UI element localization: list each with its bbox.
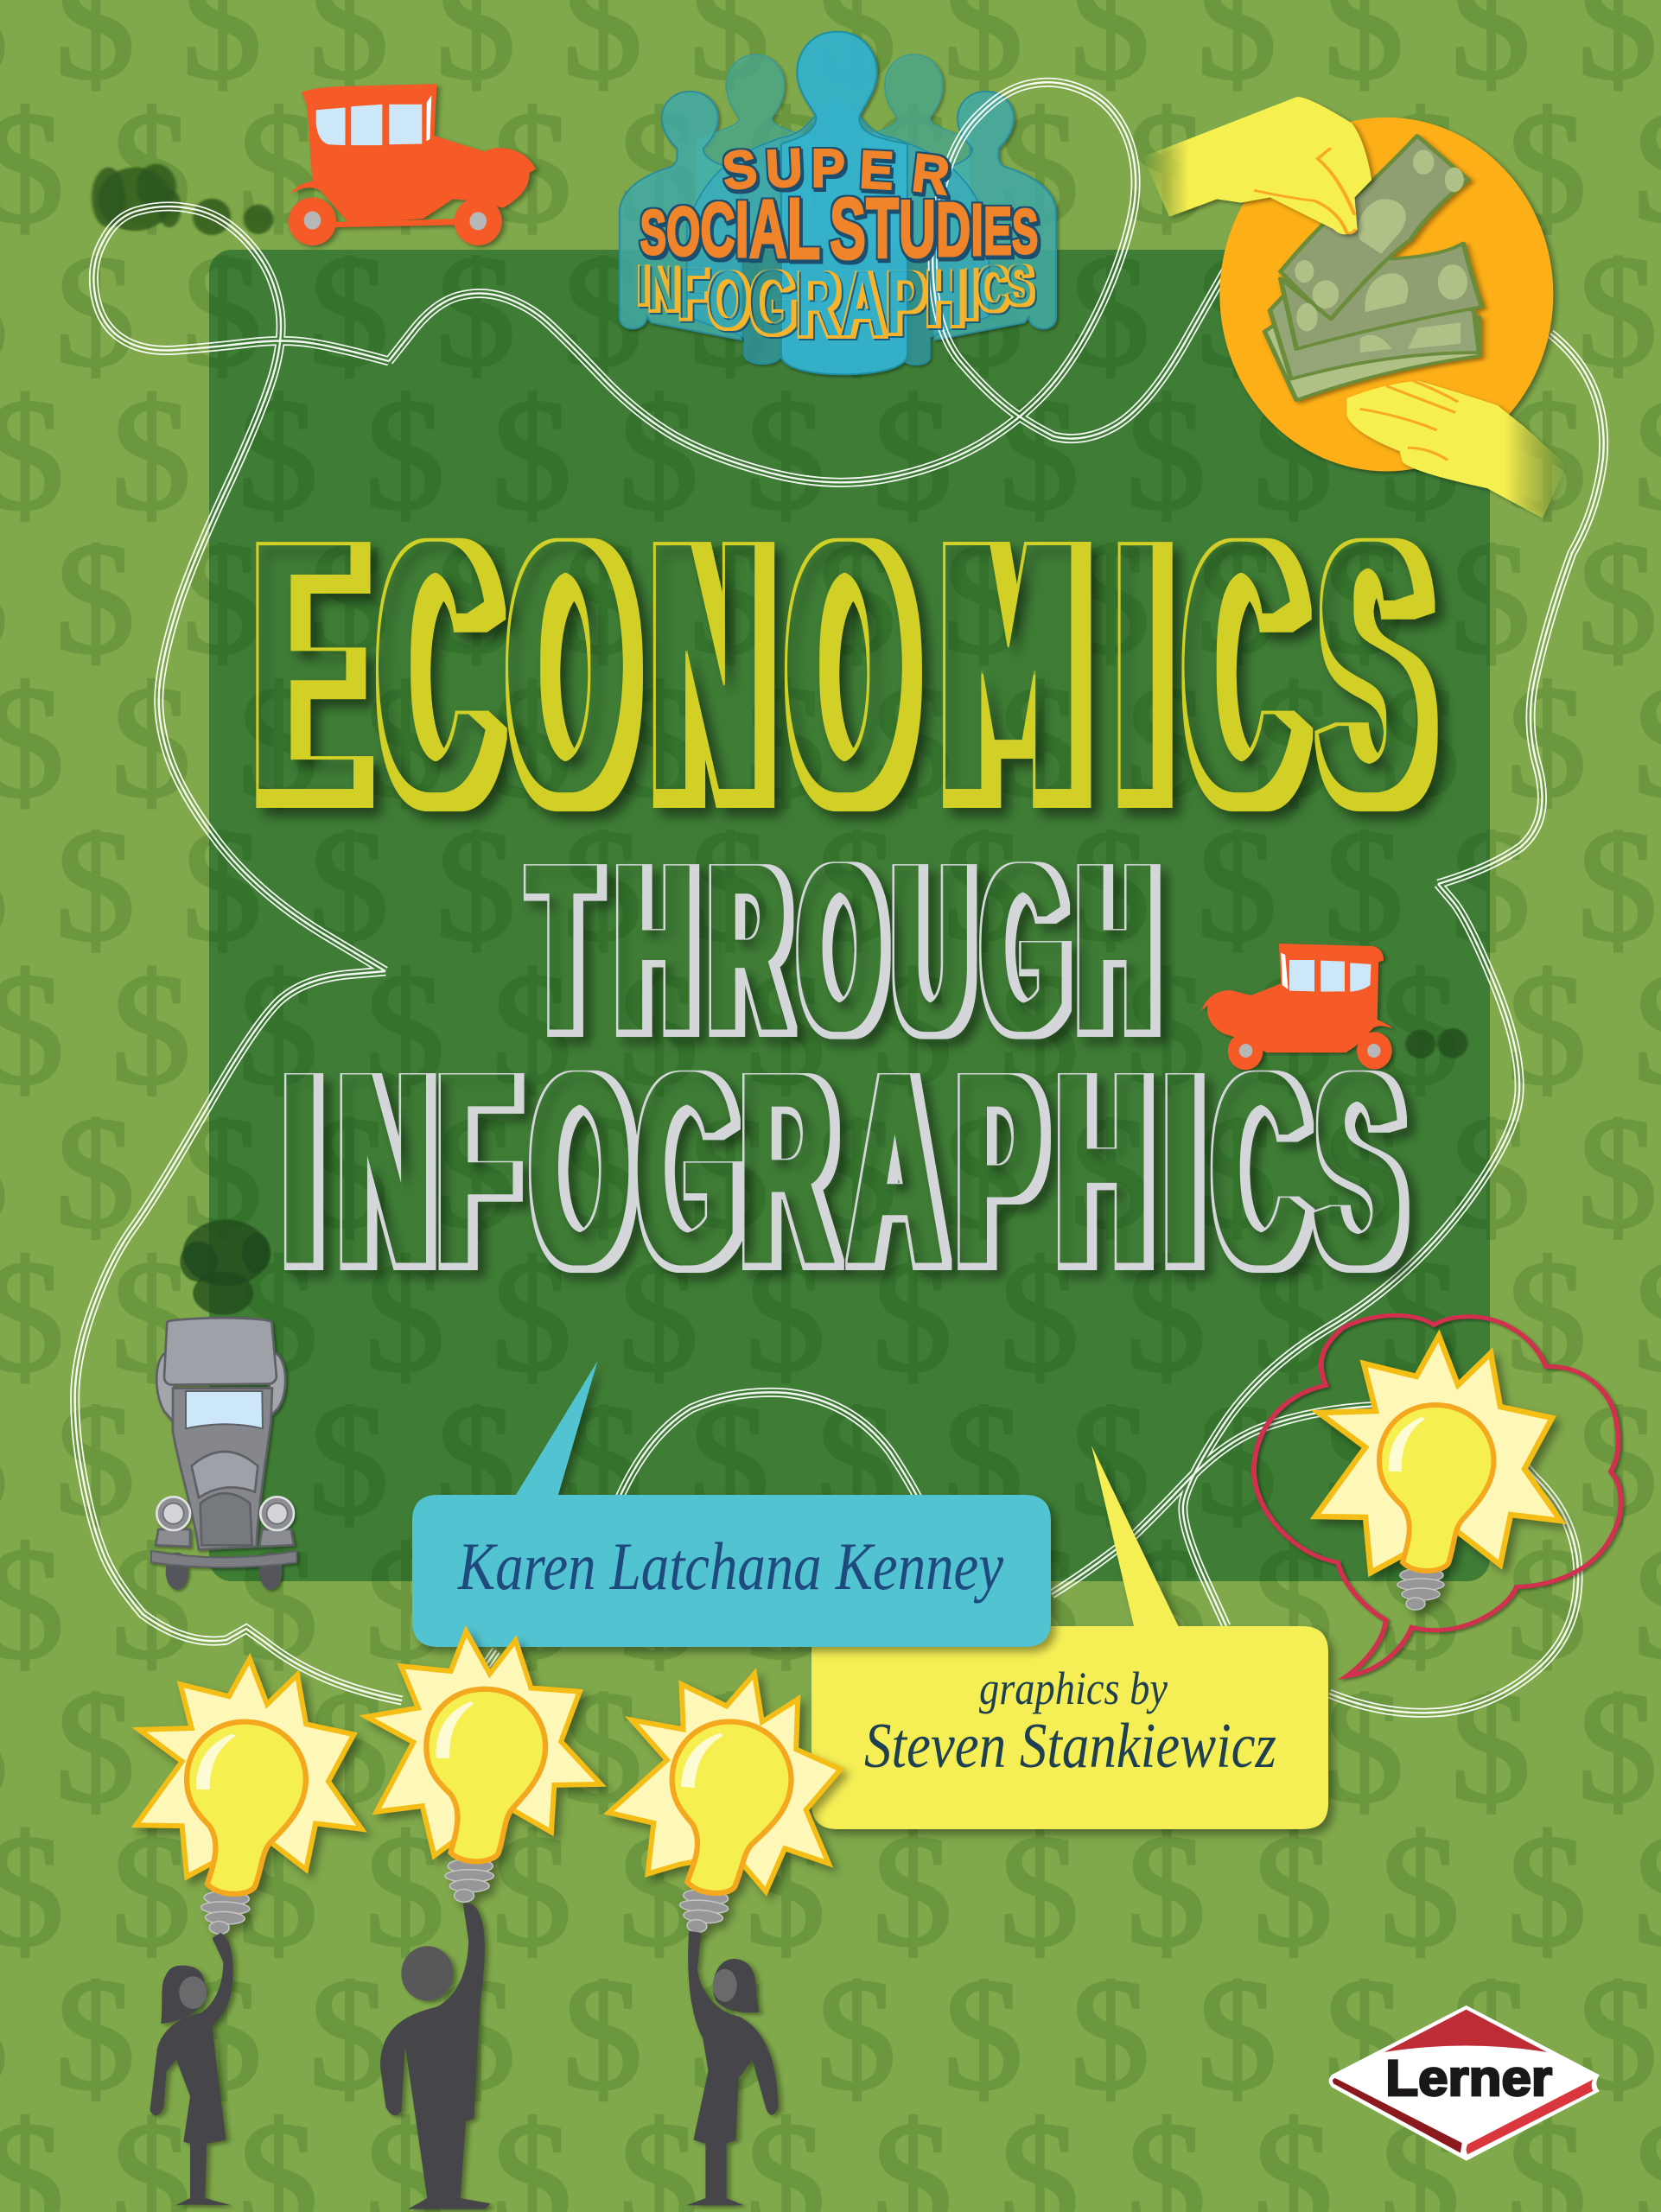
logo word: infographics: C (978, 255, 1009, 326)
title: economics: ECONO (263, 467, 912, 882)
dark green central panel (209, 250, 1490, 1581)
logo wordmark: Lerner (1385, 2051, 1552, 2107)
orange car top left (289, 84, 536, 245)
smoke: orange car top left (92, 164, 273, 235)
silhouettes holding bulbs (150, 1903, 779, 2209)
logo words: social studies: S (640, 197, 666, 268)
logo word: infographics: S (1009, 254, 1034, 317)
upper hand (1142, 97, 1371, 234)
logo word: infographics: H (926, 253, 965, 344)
logo words: social studies: L (787, 180, 820, 277)
logo word: infographics: R (797, 251, 842, 358)
title: economics: ICS (1124, 467, 1427, 882)
lower hand (1346, 381, 1567, 518)
logo word: infographics: P (887, 251, 926, 353)
blue speech box: author (412, 1361, 1051, 1647)
light bulb in thought bubble (1315, 1336, 1561, 1610)
logo words: social studies: S (1012, 196, 1038, 267)
logo word: infographics: I (965, 256, 978, 336)
logo words: social studies: C (700, 187, 735, 272)
credit: graphics by: graphics by (979, 1662, 1168, 1714)
logo words: social studies: A (749, 183, 787, 276)
author name: Karen Latchana Kenney (457, 1529, 1003, 1604)
red thought bubble (1254, 1315, 1621, 1676)
light bulb 1 (136, 1659, 362, 1936)
orange circle (1219, 118, 1553, 471)
second orange car (1201, 944, 1393, 1070)
logo words: social studies: T (866, 182, 899, 276)
winding triple-line road (70, 78, 1609, 1718)
money exchange illustration (1142, 97, 1567, 518)
logo words: social studies: U (899, 183, 936, 274)
stack of dollar bills (1264, 136, 1482, 400)
credit: illustrator name: Steven Stankiewicz (864, 1711, 1276, 1782)
smoke: second orange car (1405, 1028, 1467, 1058)
grey car front view (151, 1318, 296, 1590)
logo word: infographics: N (649, 255, 679, 326)
yellow speech box: illustrator credit (811, 1446, 1328, 1829)
logo figures (620, 32, 1056, 374)
title: economics: M (946, 479, 1088, 887)
title: economics (263, 467, 1427, 887)
publisher logo: Lerner (1329, 2006, 1599, 2160)
logo words: social studies: S (830, 180, 866, 277)
title: through infographics (286, 817, 1403, 1324)
light bulb 2 (353, 1616, 608, 1902)
silhouette 3 (686, 1931, 779, 2205)
silhouette 2 (380, 1903, 491, 2209)
logo words: social studies: E (983, 193, 1012, 269)
logo words: social studies (640, 180, 1038, 277)
logo word: infographics: O (709, 255, 750, 346)
title word: through: THROUGH (533, 817, 1157, 1082)
logo word: super: SUPER (719, 137, 952, 207)
light bulb 3 (598, 1650, 864, 1939)
logo word: infographics: F (679, 256, 709, 336)
series logo text (639, 137, 1038, 358)
logo words: social studies: I (971, 189, 983, 270)
logo word: infographics: G (750, 251, 797, 353)
logo words: social studies: I (735, 186, 749, 274)
logo words: social studies: O (666, 193, 700, 270)
logo word: infographics: I (639, 254, 649, 317)
title word: infographics: INFOGRAPHICS (286, 1020, 1403, 1324)
smoke: grey car (180, 1220, 270, 1315)
logo words: social studies: D (936, 187, 971, 272)
logo word: infographics: A (842, 251, 887, 358)
logo word: infographics (639, 251, 1034, 358)
silhouette 1 (150, 1933, 233, 2205)
